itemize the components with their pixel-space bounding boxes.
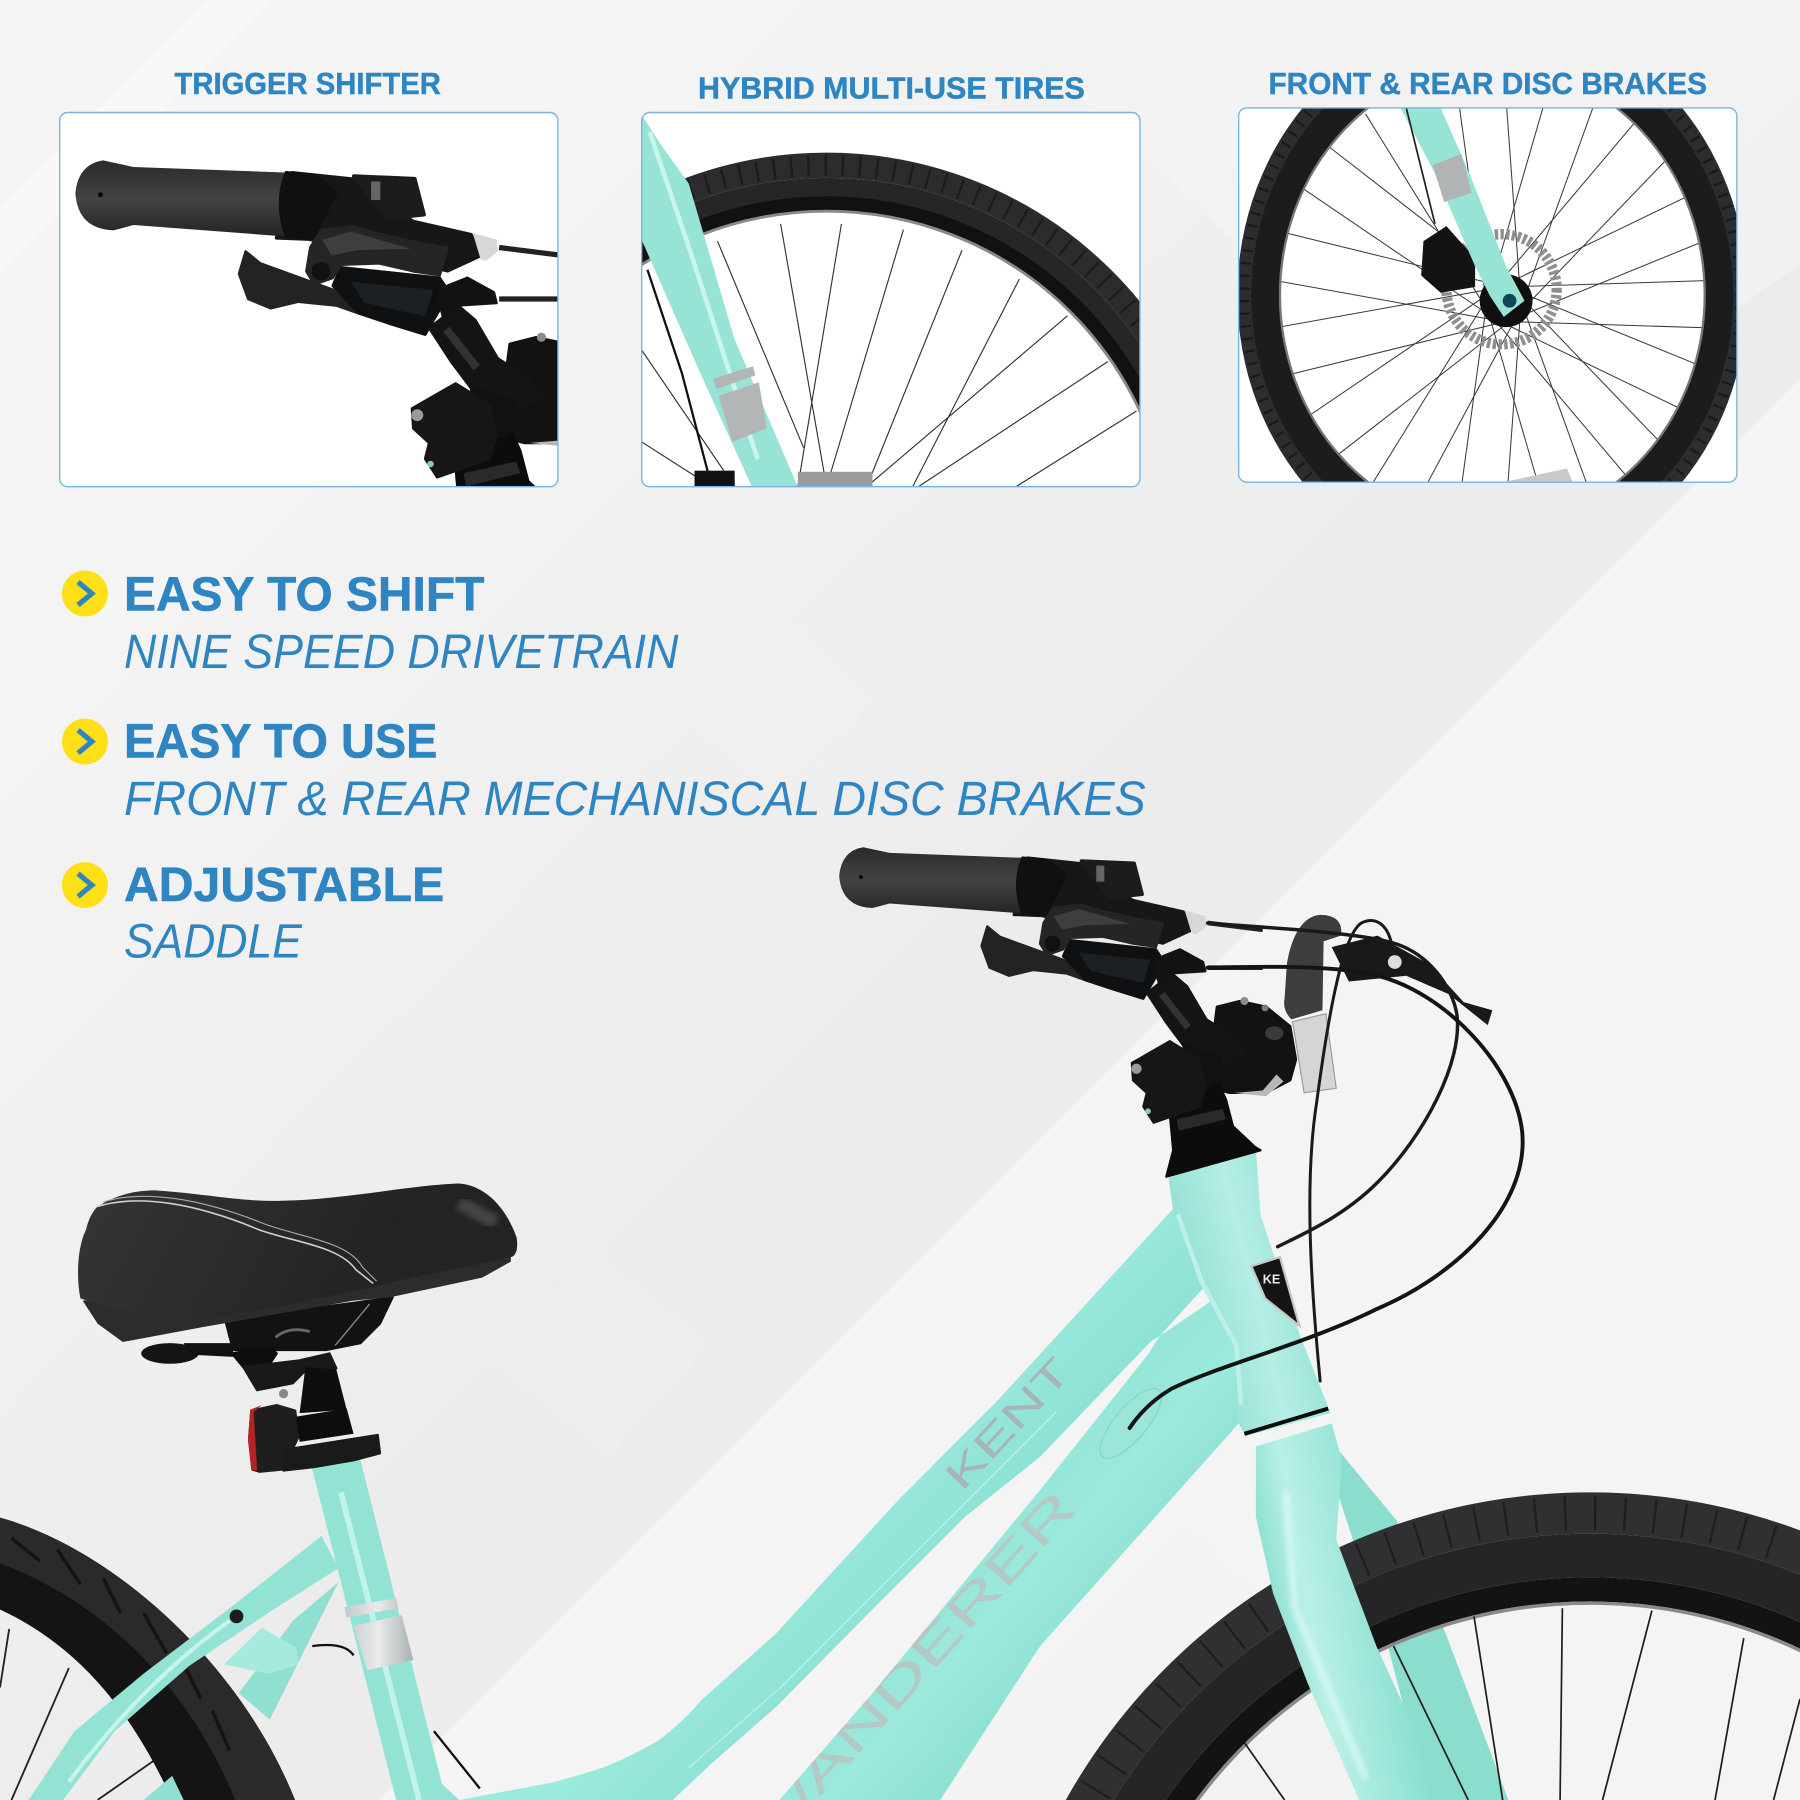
cables near seat tube xyxy=(312,1645,480,1789)
bicycle illustration xyxy=(0,847,1800,1800)
reflector xyxy=(1504,468,1573,482)
spokes xyxy=(1244,1608,1800,1800)
bolt xyxy=(230,1609,243,1623)
sidewall band xyxy=(1114,1534,1800,1800)
inner black band xyxy=(1166,1577,1800,1800)
icon: chevron bullet xyxy=(62,571,108,616)
reflector xyxy=(1293,1014,1336,1093)
head tube xyxy=(1169,1148,1330,1436)
rail knob xyxy=(141,1343,199,1364)
front fork leg xyxy=(1256,1423,1428,1800)
tire xyxy=(1239,108,1736,482)
disc rotor xyxy=(1446,234,1557,344)
rear wheel xyxy=(0,1518,295,1800)
feature heading: ADJUSTABLE xyxy=(124,858,444,912)
right grip and lever xyxy=(1284,915,1492,1025)
seat post and clamp xyxy=(141,1297,393,1473)
collar xyxy=(296,1409,354,1442)
panel: trigger shifter photo xyxy=(60,114,558,486)
rear stays xyxy=(143,1582,339,1800)
clamp xyxy=(232,1347,277,1370)
feature subtext: NINE SPEED DRIVETRAIN xyxy=(124,625,679,679)
panel border: hybrid tires xyxy=(642,112,1140,487)
panel border: trigger shifter xyxy=(60,112,558,487)
rim edge xyxy=(1195,1601,1800,1800)
front fork rear leg xyxy=(1339,1451,1508,1800)
caliper and hub xyxy=(1421,226,1475,293)
tread band xyxy=(1066,1492,1800,1800)
spokes xyxy=(642,224,1136,487)
saddle mechanism xyxy=(226,1297,393,1350)
icon: chevron bullet xyxy=(62,862,108,908)
cable port recess xyxy=(1100,1388,1162,1459)
heading: hybrid tires: HYBRID MULTI-USE TIRES xyxy=(698,71,1085,106)
handlebar assembly xyxy=(839,847,1296,1177)
feature: adjustable xyxy=(62,858,444,968)
panel border: disc brakes xyxy=(1239,108,1737,482)
tread marks xyxy=(1095,1513,1791,1791)
image: handlebar close-up xyxy=(75,160,558,486)
brake and shift cables xyxy=(1130,921,1523,1428)
icon: chevron bullet xyxy=(62,719,108,765)
post xyxy=(300,1367,347,1413)
head badge xyxy=(1251,1257,1299,1326)
feature: easy to shift xyxy=(62,568,679,679)
main frame tubes xyxy=(459,1209,1251,1800)
panel: hybrid tires photo xyxy=(642,114,1140,486)
head badge: KE xyxy=(1263,1272,1280,1286)
feature: easy to use xyxy=(62,715,1146,826)
feature subtext: FRONT & REAR MECHANISCAL DISC BRAKES xyxy=(124,772,1146,826)
front wheel xyxy=(1066,1492,1800,1800)
fork xyxy=(642,115,798,487)
spokes xyxy=(1282,108,1704,482)
fork xyxy=(1401,108,1524,317)
feature subtext: SADDLE xyxy=(124,914,303,968)
saddle xyxy=(78,1184,517,1342)
seat tube xyxy=(308,1442,459,1800)
heading: trigger shifter: TRIGGER SHIFTER xyxy=(174,66,441,101)
feature heading: EASY TO SHIFT xyxy=(124,568,484,622)
brand text KENT: KENT xyxy=(937,1350,1080,1498)
rear light xyxy=(248,1404,300,1473)
heading: disc brakes: FRONT & REAR DISC BRAKES xyxy=(1268,66,1707,101)
feature heading: EASY TO USE xyxy=(124,715,437,769)
panel: disc brakes photo xyxy=(1239,108,1736,482)
upper seat stay tube xyxy=(29,1536,339,1800)
tire xyxy=(642,152,1140,414)
upper tube xyxy=(459,1209,1205,1800)
clamp ring xyxy=(284,1435,380,1471)
lower tube xyxy=(780,1302,1239,1800)
